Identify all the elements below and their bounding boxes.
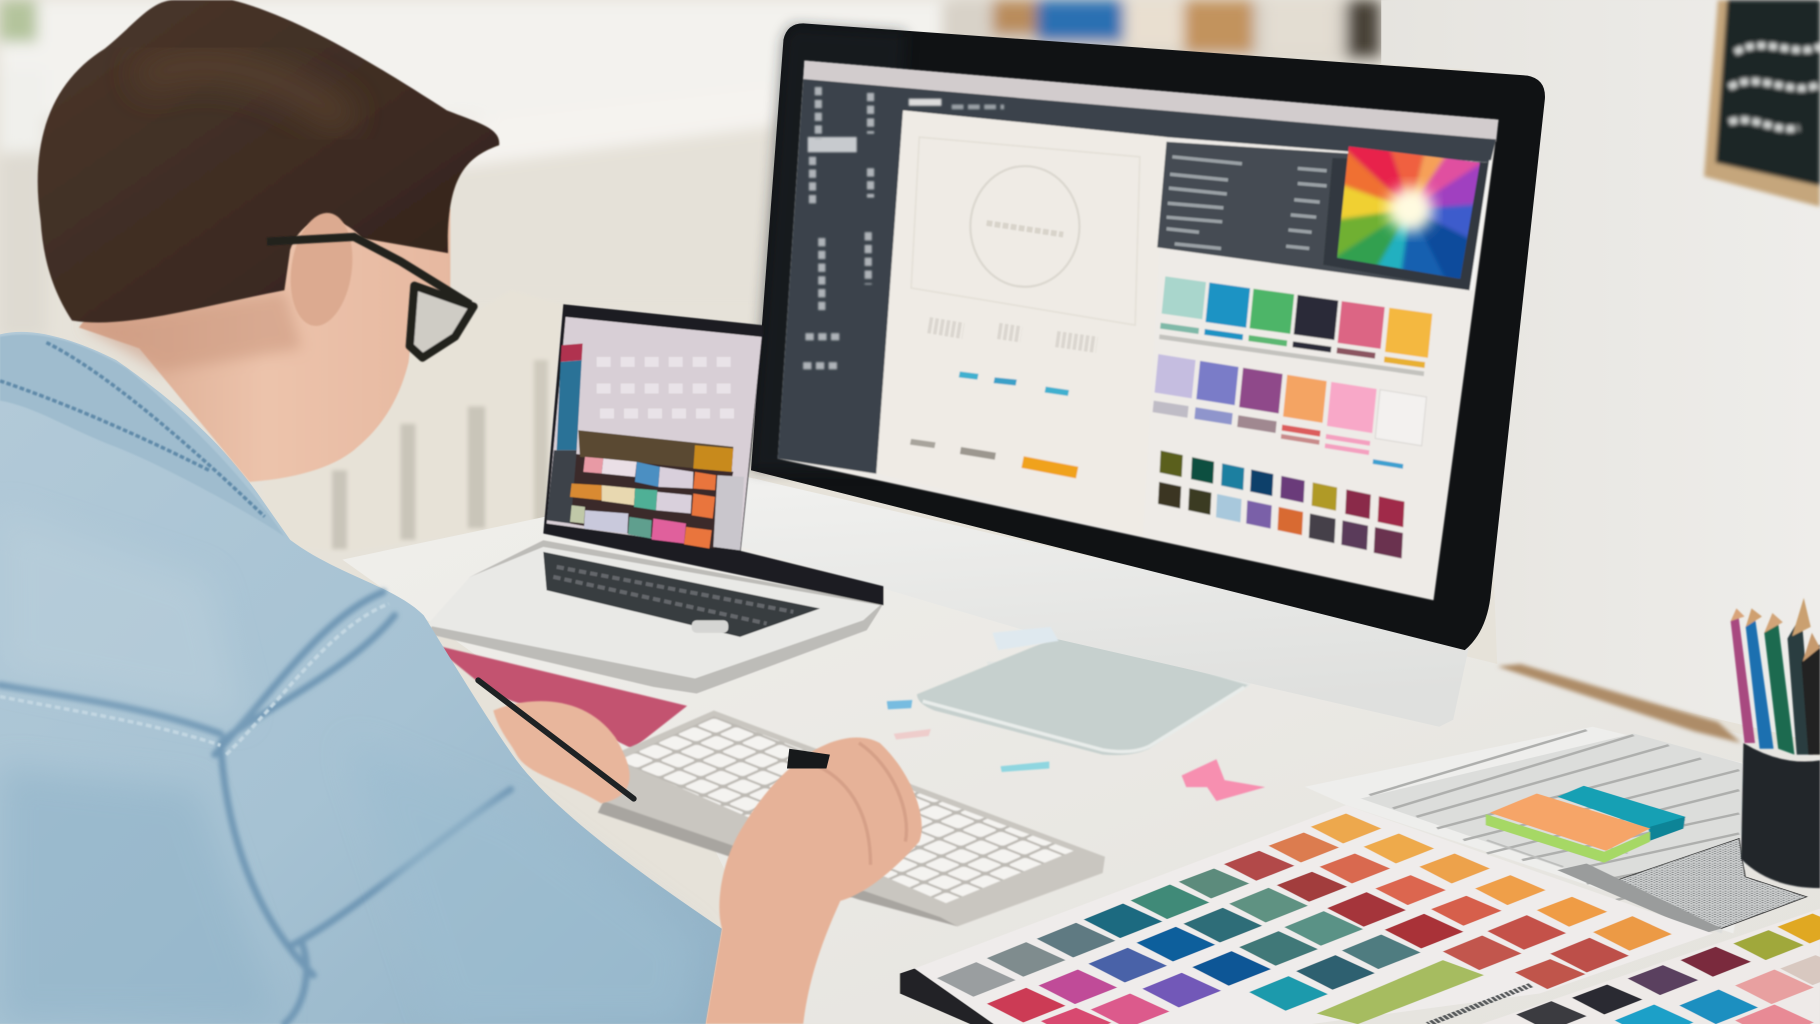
laptop display [547, 317, 762, 550]
desktop monitor [738, 23, 1545, 755]
loose notes on desk [887, 627, 1265, 801]
monitor stand [917, 633, 1265, 755]
right arm and hand [706, 738, 922, 1024]
monitor screen [778, 60, 1498, 600]
laptop lid [543, 304, 883, 605]
speckled paper [1607, 838, 1807, 928]
designer [0, 0, 922, 1024]
right wall [1381, 0, 1820, 743]
window [0, 0, 952, 337]
left hand [493, 701, 630, 803]
pen in right hand [787, 749, 830, 769]
glasses [267, 237, 474, 358]
colour swatch chart [900, 805, 1713, 1024]
laptop [427, 304, 883, 694]
ear [284, 209, 359, 330]
framed chalkboard [1704, 0, 1820, 207]
document sheet with sticky notes [1305, 727, 1807, 933]
left tool panel [803, 87, 1004, 366]
bookshelf [942, 0, 1384, 60]
swatch rows [1159, 276, 1432, 376]
pink folder [432, 644, 687, 749]
pencils [1731, 598, 1820, 755]
pink sticky note [1182, 759, 1265, 801]
artboard paper [876, 110, 1167, 536]
monitor bezel [751, 23, 1545, 650]
laptop base [427, 540, 883, 694]
keyboard [598, 710, 1105, 926]
rainbow colour picker [1336, 145, 1481, 280]
sticky note stack [1486, 786, 1685, 863]
monitor chin [738, 476, 1469, 727]
shirt [0, 332, 722, 1024]
pen in left hand [478, 680, 634, 799]
second palette chart [1481, 908, 1820, 1024]
radiator [261, 290, 562, 551]
settings panel [1157, 142, 1489, 290]
pencil cup [1731, 598, 1820, 888]
desk surface [342, 478, 1820, 1024]
neck and face [79, 163, 450, 482]
hair [38, 0, 499, 322]
